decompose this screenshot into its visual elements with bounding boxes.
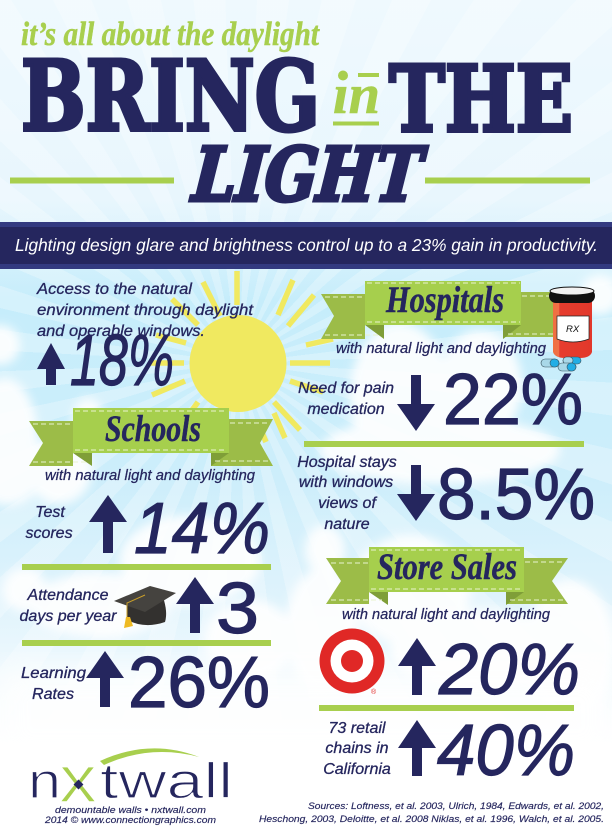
rule bbox=[22, 640, 271, 646]
banner bbox=[0, 222, 612, 269]
arrow up: 14% bbox=[89, 495, 127, 553]
schools subtitle: with natural light and daylighting bbox=[45, 468, 255, 484]
label: hospital stays bbox=[297, 454, 397, 533]
ribbon: Store Sales bbox=[326, 547, 568, 605]
stat 40%: 40% bbox=[437, 711, 575, 791]
hospitals subtitle: with natural light and daylighting bbox=[336, 341, 546, 357]
label: test scores bbox=[25, 504, 73, 542]
label: test scores: scores bbox=[25, 525, 73, 542]
access text: and operable windows. bbox=[37, 323, 205, 340]
stat 22%: 22% bbox=[443, 360, 583, 440]
access text: Access to the natural bbox=[36, 281, 192, 298]
subtitle: it’s all about the daylight bbox=[21, 16, 320, 53]
rule bbox=[304, 441, 584, 447]
rule bbox=[319, 705, 574, 711]
label: hospital stays: views of bbox=[318, 495, 377, 512]
icon: pill bottle bbox=[541, 287, 595, 371]
title: THE: THE bbox=[389, 47, 573, 153]
label: hospital stays: with windows bbox=[299, 474, 393, 491]
logo tagline: 2014 © www.connectiongraphics.com bbox=[44, 815, 217, 825]
stat 18%: 18% bbox=[70, 321, 174, 401]
title: in: ın bbox=[333, 64, 380, 126]
arrow up: 20% bbox=[398, 638, 436, 695]
label: retail chains: chains in bbox=[325, 740, 389, 757]
sources bbox=[259, 801, 604, 824]
label: retail chains: California bbox=[323, 761, 391, 778]
sources: Heschong, 2003, Deloitte, et al. 2008 Niklas, et al. 1996, Walch, et al. 2005. bbox=[259, 814, 604, 824]
logo tagline bbox=[44, 805, 217, 825]
logo: nxtwall bbox=[28, 742, 233, 817]
arrow up: 40% bbox=[398, 720, 436, 776]
label: attendance: days per year bbox=[20, 608, 117, 625]
logo: nxtwall: n bbox=[28, 753, 61, 809]
label: pain medication bbox=[298, 380, 394, 418]
stat 20%: 20% bbox=[438, 630, 580, 710]
label: retail chains: 73 retail bbox=[329, 720, 386, 737]
stat 8.5%: 8.5% bbox=[437, 455, 595, 535]
arrow up: 3 bbox=[176, 577, 214, 633]
arrow down: 22% bbox=[397, 375, 435, 431]
rule bbox=[22, 564, 271, 570]
label: attendance: Attendance bbox=[27, 587, 109, 604]
background clouds bbox=[0, 275, 612, 760]
label: attendance bbox=[20, 587, 117, 625]
stat 26%: 26% bbox=[128, 643, 270, 723]
icon: pill bottle: RX bbox=[566, 324, 580, 335]
arrow up: 18% bbox=[37, 343, 65, 385]
banner text: Lighting design glare and brightness control up to a 23% gain in productivity. bbox=[15, 235, 598, 255]
label: learning rates: Rates bbox=[32, 686, 74, 703]
arrow up: 26% bbox=[86, 651, 124, 707]
label: learning rates bbox=[21, 665, 86, 703]
label: learning rates: Learning bbox=[21, 665, 86, 682]
store subtitle: with natural light and daylighting bbox=[342, 607, 550, 623]
label: hospital stays: Hospital stays bbox=[297, 454, 397, 471]
icon: target logo bbox=[320, 628, 384, 696]
ribbon: Schools bbox=[29, 408, 273, 466]
ribbon label: Store Sales: Store Sales bbox=[377, 547, 517, 588]
stat 3: 3 bbox=[216, 569, 259, 649]
label: test scores: Test bbox=[35, 504, 65, 521]
access text bbox=[36, 281, 254, 340]
logo: nxtwall: twall bbox=[100, 753, 233, 809]
title: BRING: BRING bbox=[21, 40, 320, 153]
label: pain medication: medication bbox=[307, 401, 385, 418]
ribbon label: Hospitals: Hospitals bbox=[385, 280, 504, 321]
label: hospital stays: nature bbox=[324, 516, 370, 533]
access text: environment through daylight bbox=[37, 302, 254, 319]
arrow down: 8.5% bbox=[397, 465, 435, 521]
title rules bbox=[10, 178, 590, 184]
label: retail chains bbox=[323, 720, 391, 778]
sources: Sources: Loftness, et al. 2003, Ulrich, 1984, Edwards, et al. 2002, bbox=[308, 801, 604, 811]
ribbon label: Schools: Schools bbox=[105, 409, 201, 450]
label: pain medication: Need for pain bbox=[298, 380, 394, 397]
logo tagline: demountable walls • nxtwall.com bbox=[55, 805, 207, 815]
stat 14%: 14% bbox=[134, 489, 270, 569]
logo: nxtwall: x bbox=[59, 742, 97, 817]
title: LIGHT: LIGHT bbox=[183, 131, 433, 218]
sun bbox=[150, 271, 333, 442]
ribbon: Hospitals bbox=[321, 280, 560, 339]
icon: graduation cap bbox=[114, 586, 176, 628]
icon: target logo: ® bbox=[371, 688, 377, 696]
